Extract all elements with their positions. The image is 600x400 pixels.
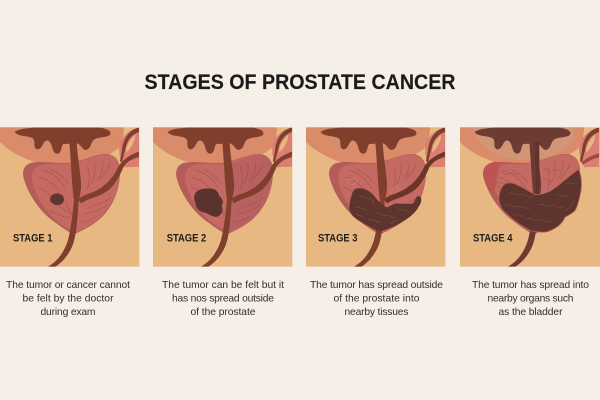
panel: stage 2 — [153, 127, 292, 267]
tumor: stage 2 — [194, 188, 223, 217]
caption: stage 4: The tumor has spread into — [472, 280, 589, 291]
panel: stage 1 — [0, 127, 139, 267]
tumor: stage 3 — [349, 188, 421, 232]
panel: stage 4 — [460, 127, 600, 267]
title: STAGES OF PROSTATE CANCER — [144, 70, 456, 94]
caption: stage 4 — [472, 280, 589, 318]
caption: stage 2: The tumor can be felt but it — [162, 280, 284, 291]
caption: stage 2: has nos spread outside — [172, 294, 274, 304]
caption: stage 3: of the prostate into — [334, 294, 420, 304]
caption: stage 4: as the bladder — [498, 307, 563, 318]
gland mottling — [347, 178, 399, 193]
caption: stage 4: nearby organs such — [488, 294, 574, 304]
label: stage 4: STAGE 4 — [473, 233, 513, 245]
caption: stage 3 — [310, 280, 443, 318]
label: stage 1: STAGE 1 — [13, 233, 53, 245]
caption: stage 1: The tumor or cancer cannot — [6, 280, 130, 291]
label: stage 3: STAGE 3 — [318, 233, 358, 245]
caption: stage 3: The tumor has spread outside — [310, 280, 443, 291]
bladder neck urethra — [535, 142, 539, 195]
tumor: stage 4 — [499, 170, 581, 232]
caption: stage 3: nearby tissues — [344, 307, 408, 318]
panel: stage 3 — [306, 127, 445, 267]
bladder spread halo — [472, 128, 575, 160]
caption: stage 2: of the prostate — [190, 307, 256, 318]
caption: stage 1 — [6, 280, 130, 318]
label: stage 2: STAGE 2 — [167, 233, 206, 245]
caption: stage 1: during exam — [40, 307, 96, 318]
caption: stage 2 — [162, 280, 284, 318]
tumor: stage 1 — [50, 193, 64, 205]
caption: stage 1: be felt by the doctor — [22, 294, 114, 304]
